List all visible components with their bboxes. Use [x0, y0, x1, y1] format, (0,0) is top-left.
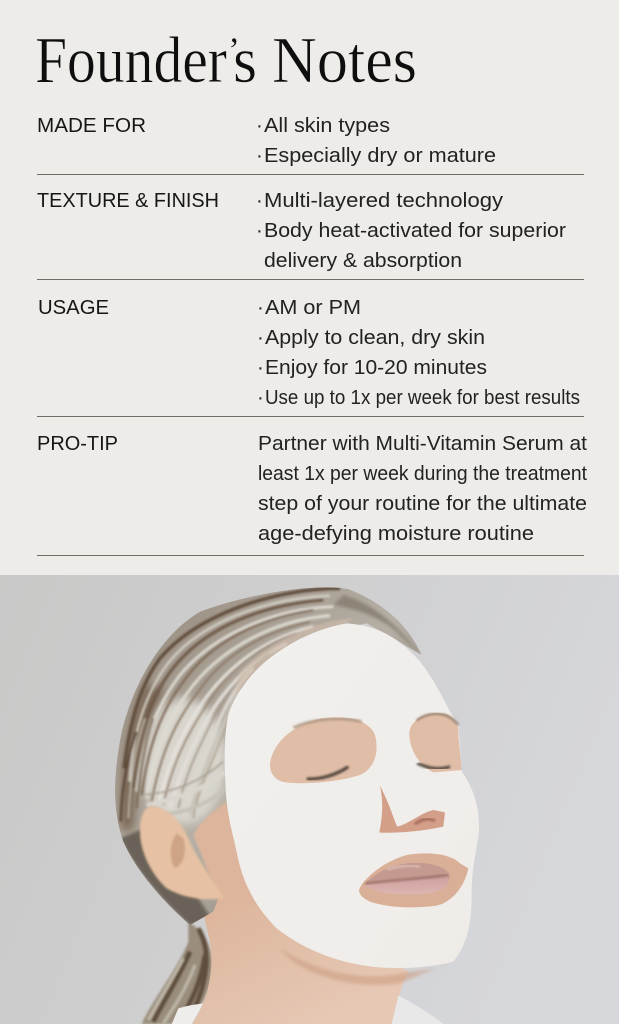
row: made for: [37, 114, 496, 167]
temple skin: [193, 802, 257, 905]
text: pro-tip body: Partner with Multi-Vitamin Serum at: [258, 432, 587, 455]
left eyelash: [307, 767, 348, 779]
robe collar: [172, 996, 443, 1024]
list: usage items: AM or PM: [265, 296, 361, 319]
nostril cutout: [379, 786, 445, 833]
panel: notes background: [0, 0, 619, 575]
neck: [192, 842, 408, 1024]
list: made for items: [256, 114, 496, 167]
list: usage items: ·: [257, 326, 264, 349]
mouth cutout with lips: [359, 853, 468, 907]
row: texture and finish: [37, 189, 566, 272]
list: usage items: ·: [257, 386, 264, 409]
title: ’: [228, 30, 240, 70]
list: made for items: ·: [256, 114, 263, 137]
text: pro-tip body: age-defying moisture routine: [258, 522, 534, 545]
list: usage items: [257, 296, 580, 409]
right eyelash: [417, 763, 450, 768]
list: usage items: Enjoy for 10-20 minutes: [265, 356, 487, 379]
list: texture items: ·: [256, 189, 263, 212]
ear: [140, 807, 224, 899]
list: texture items: delivery & absorption: [264, 249, 462, 272]
list: texture items: ·: [256, 219, 263, 242]
title: Notes: [272, 24, 417, 97]
label: texture and finish: TEXTURE & FINISH: [37, 189, 219, 212]
title: s: [233, 24, 257, 97]
row: pro-tip: [37, 432, 587, 545]
text: pro-tip body: [258, 432, 587, 545]
list: usage items: Apply to clean, dry skin: [265, 326, 485, 349]
list: usage items: ·: [257, 356, 264, 379]
label: pro-tip: PRO-TIP: [37, 432, 118, 455]
sheet mask: [225, 623, 479, 968]
list: usage items: Use up to 1x per week for best results: [265, 386, 580, 409]
right eye hole: [409, 713, 462, 772]
panel: photo of woman wearing sheet mask: [0, 575, 619, 1024]
ponytail: [142, 922, 213, 1024]
brown hair at back of head: [121, 685, 163, 832]
label: made for: MADE FOR: [37, 114, 146, 137]
hair: [115, 587, 422, 925]
crown near parting: [334, 594, 416, 650]
row: usage: [38, 296, 580, 409]
list: texture items: Multi-layered technology: [264, 189, 504, 212]
hair shadow behind ear: [120, 828, 213, 925]
list: usage items: ·: [257, 296, 264, 319]
list: made for items: ·: [256, 144, 263, 167]
silver hair highlight: [140, 698, 227, 825]
list: made for items: All skin types: [264, 114, 390, 137]
list: texture items: [256, 189, 566, 272]
title: Founder: [35, 24, 227, 97]
list: made for items: Especially dry or mature: [264, 144, 496, 167]
text: pro-tip body: step of your routine for the ultimate: [258, 492, 587, 515]
label: usage: USAGE: [38, 296, 109, 319]
left eye hole: [270, 717, 377, 783]
neck shadow under jaw: [280, 948, 447, 985]
text: pro-tip body: least 1x per week during the treatment: [258, 462, 587, 485]
pale hairline near forehead: [233, 618, 353, 698]
title: [35, 24, 417, 97]
list: texture items: Body heat-activated for superior: [264, 219, 566, 242]
